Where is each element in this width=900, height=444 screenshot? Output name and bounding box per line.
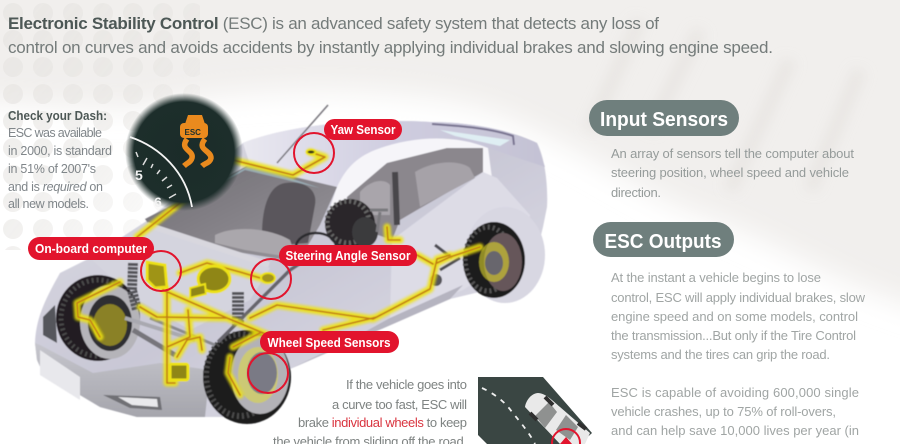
- roof: [243, 121, 545, 187]
- front seats: [262, 182, 315, 245]
- text block: check your dash: in 51% of 2007's: [8, 162, 96, 176]
- text block: esc statistics: and can help save 10,000 lives per year (in: [611, 423, 859, 438]
- label: on-board computer: [28, 237, 154, 260]
- text block: esc outputs: systems and the tires can grip the road.: [611, 347, 830, 362]
- label: steering angle sensor: [279, 245, 417, 266]
- text block: check your dash: Check your Dash:: [8, 108, 107, 123]
- label: wheel speed sensors: Wheel Speed Sensors: [268, 336, 391, 350]
- hood pale area: [90, 228, 270, 330]
- side window and rear seats: [347, 148, 483, 240]
- text block: check your dash: in 2000, is standard: [8, 144, 112, 158]
- yellow components: [147, 262, 167, 288]
- text block: curve explanation: If the vehicle goes into: [346, 377, 467, 392]
- label: wheel speed sensors: [260, 331, 399, 353]
- heading: input sensors: [589, 100, 739, 136]
- text block: input sensors: steering position, wheel speed and vehicle: [611, 165, 849, 180]
- rear spoiler edge: [432, 124, 514, 145]
- illustration: car cutaway: [35, 105, 547, 424]
- label: on-board computer: On-board computer: [35, 242, 147, 256]
- intro text: Electronic Stability Control (ESC) is an advanced safety system that detects any loss of: [8, 14, 659, 33]
- text block: check your dash: and is required on: [8, 180, 103, 194]
- steering wheel: [296, 233, 336, 261]
- grille: [43, 305, 57, 343]
- background: pale textured road: [0, 0, 900, 302]
- intro text: [8, 14, 773, 57]
- text block: curve explanation: [273, 377, 467, 444]
- a-pillar white swoosh: [329, 138, 492, 232]
- windshield and front cabin: [145, 166, 337, 262]
- text block: input sensors: An array of sensors tell the computer about: [611, 146, 854, 161]
- icon: dashboard dial with ESC warning light: 6: [154, 194, 162, 210]
- text block: esc outputs: At the instant a vehicle begins to lose: [611, 270, 821, 285]
- text block: esc outputs: control, ESC will apply individual brakes, slow: [611, 290, 866, 305]
- car body: [35, 121, 547, 417]
- red sensor circles: [141, 133, 334, 393]
- label: yaw sensor: Yaw Sensor: [330, 123, 396, 137]
- diagram: car on curved road: [478, 377, 592, 444]
- wheel arch light: [465, 207, 545, 303]
- text block: esc statistics: vehicle crashes, up to 75% of roll-overs,: [611, 404, 836, 419]
- label: yaw sensor: [324, 119, 402, 140]
- text block: curve explanation: brake individual wheels to keep: [298, 415, 467, 430]
- heading: input sensors: Input Sensors: [600, 108, 728, 131]
- text block: check your dash: all new models.: [8, 197, 89, 211]
- text block: input sensors: direction.: [611, 185, 661, 200]
- text block: curve explanation: a curve too fast, ESC will: [332, 397, 467, 412]
- text block: check your dash: [8, 108, 112, 211]
- heading: esc outputs: ESC Outputs: [604, 230, 722, 253]
- text block: esc outputs: engine speed and on some models, control: [611, 309, 858, 324]
- heading: esc outputs: [593, 222, 734, 257]
- icon: dashboard dial with ESC warning light: 5: [135, 167, 143, 183]
- text block: esc outputs: [611, 270, 866, 362]
- antenna: [277, 105, 328, 163]
- front bumper: [35, 343, 210, 417]
- tyres: [56, 275, 140, 361]
- text block: input sensors: [611, 146, 854, 200]
- yellow wiring glow: [77, 152, 480, 395]
- label: steering angle sensor: Steering Angle Sensor: [286, 249, 411, 263]
- icon: dashboard dial with ESC warning light: [125, 93, 243, 211]
- text block: esc statistics: [611, 385, 859, 444]
- icon: dashboard dial with ESC warning light: ESC: [184, 128, 201, 137]
- text block: esc statistics: ESC is capable of avoiding 600,000 single: [611, 385, 859, 400]
- suspension and steering rack: [132, 263, 137, 310]
- intro text: control on curves and avoids accidents by instantly applying individual brakes and slowing engine speed.: [8, 38, 773, 57]
- text block: check your dash: ESC was available: [8, 126, 102, 140]
- text block: esc outputs: the transmission...But only if the Tire Control: [611, 328, 856, 343]
- side door panels: [390, 172, 530, 318]
